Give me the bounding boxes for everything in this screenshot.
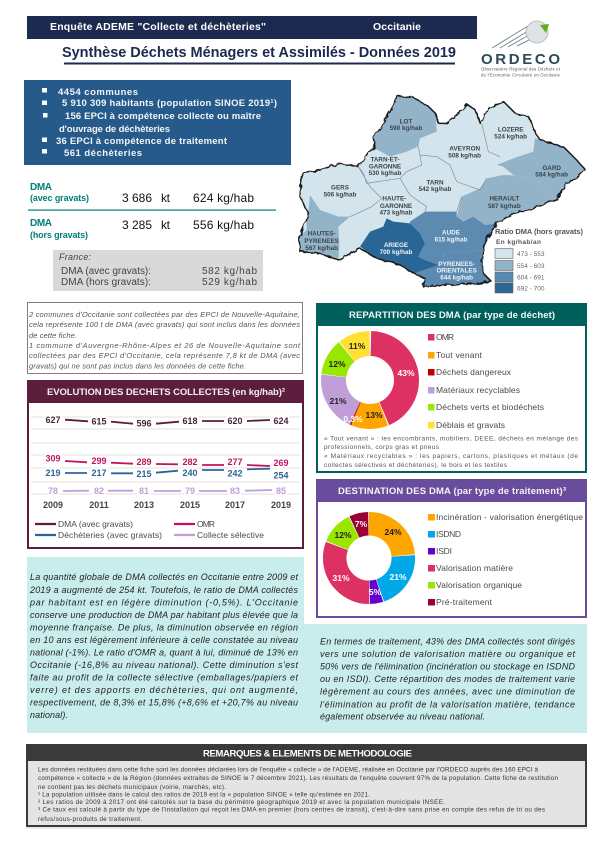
note: communes outside the perimeter: gravats) qui ne sont pas inclus dans les données de cette fiche.	[29, 362, 246, 370]
note: communes outside the perimeter	[28, 302, 302, 374]
title: Synthèse Déchets Ménagers et Assimilés - Données 2019	[62, 45, 456, 61]
map region: Lot	[373, 97, 437, 157]
line series: Collecte sélective	[63, 490, 272, 491]
labels: Collecte sélective: 78	[48, 486, 58, 496]
panel: breakdown by waste type	[316, 303, 587, 472]
panel: key figures: 561 déchèteries	[64, 148, 142, 159]
map region: Pyrenees-Orientales	[413, 250, 492, 287]
map department labels: GARD	[542, 165, 561, 172]
legend: waste types: Tout venant	[436, 350, 483, 360]
donut labels: waste types: 43%	[397, 368, 415, 378]
map legend: 692 - 700	[517, 286, 545, 292]
map outline	[299, 97, 585, 287]
donut labels: treatment types: 24%	[384, 527, 402, 537]
map department labels: 590 kg/hab	[390, 125, 422, 132]
regional DMA figures: 556 kg/hab	[193, 218, 254, 232]
definitions note: « Matériaux recyclables » : les papiers, cartons, plastiques et métaux (de	[324, 453, 578, 460]
labels: OMR: 269	[273, 458, 289, 468]
text panel: treatment commentary: 50% vers de l'élimination (incinération ou stockage en ISDND	[320, 662, 576, 672]
legend: waste types: OMR	[436, 332, 454, 342]
panel: France comparison: 582 kg/hab	[202, 266, 257, 277]
regional DMA figures: 3 285	[122, 218, 152, 232]
regional DMA figures: DMA	[30, 182, 52, 193]
panel: remarks and methodology	[26, 744, 587, 829]
text panel: collection commentary: 2019 a augmenté de 254 kt. Toutefois, le ratio de DMA collectés	[29, 585, 298, 595]
panel: France comparison: DMA (avec gravats):	[61, 266, 151, 277]
panel: key figures: 5 910 309 habitants (population SINOE 2019¹)	[62, 98, 277, 109]
panel: key figures	[24, 80, 291, 165]
map legend: 554 - 603	[517, 263, 545, 270]
legend: treatment types: Valorisation matière	[436, 563, 513, 573]
legend: treatment types: Incinération - valorisation énergétique	[436, 512, 583, 522]
x axis years: 2009	[43, 500, 63, 510]
panel heading: methodology	[26, 744, 587, 761]
legend: treatment types	[428, 512, 583, 607]
panel: evolution of collected waste	[27, 380, 304, 548]
map department labels: AVEYRON	[449, 146, 481, 153]
donut labels: treatment types: 12%	[334, 530, 352, 540]
donut labels: waste types: 13%	[365, 410, 383, 420]
donut labels: waste types	[328, 341, 415, 424]
map department labels: HERAULT	[489, 196, 519, 203]
chart grid	[31, 417, 300, 494]
map department labels: TARN	[426, 179, 444, 186]
x axis years: 2019	[271, 500, 291, 510]
map department labels: 473 kg/hab	[380, 210, 412, 217]
definitions note: professionnels, corps gras et pneus	[324, 444, 440, 451]
panel: France comparison	[53, 250, 263, 291]
line series: DMA	[65, 420, 270, 424]
panel: key figures: 36 EPCI à compétence de traitement	[56, 136, 228, 147]
labels: DMA: 618	[182, 416, 198, 426]
chart legend: Déchèteries (avec gravats)	[58, 530, 162, 540]
labels: Déchèteries: 240	[182, 468, 198, 478]
text panel: collection commentary: national).	[30, 710, 68, 720]
legend: treatment types: ISDND	[436, 529, 461, 539]
text panel: collection commentary: verre) et des apports en déchèteries, qui ont augmenté,	[30, 685, 298, 695]
text panel: collection commentary: Occitanie (-16,8% au niveau national). Cette diminution s'est	[30, 660, 298, 670]
chart legend: Collecte sélective	[197, 530, 264, 540]
donut labels: waste types: 11%	[349, 341, 366, 351]
note: communes outside the perimeter: de cette fiche.	[29, 331, 77, 340]
panel heading: destination: DESTINATION DES DMA (par type de traitement)³	[338, 486, 566, 497]
regional DMA figures	[28, 182, 276, 240]
donut labels: waste types: 12%	[328, 359, 346, 369]
note: communes outside the perimeter: cela représente 100 t de DMA (avec gravats) qui sont inclus dans les données	[29, 320, 300, 329]
definitions note	[324, 436, 579, 469]
labels: OMR: 289	[136, 457, 152, 467]
map department labels: 644 kg/hab	[440, 274, 473, 281]
map department labels: 508 kg/hab	[448, 152, 481, 159]
panel: France comparison: 529 kg/hab	[202, 277, 257, 288]
labels: Collecte sélective: 81	[139, 486, 149, 496]
logo: ORDECO: ORDECO	[481, 51, 560, 68]
text panel: collection commentary: conserve une production de DMA par habitant plus élevée que la	[30, 610, 298, 620]
text panel: collection commentary: par habitant est en légère diminution (-0,5%). L'Occitanie	[29, 597, 298, 607]
map legend: 473 - 553	[517, 251, 545, 258]
note: communes outside the perimeter: 2 communes d'Occitanie sont collectées par des EPCI de Nouvelle-Aquitaine,	[28, 310, 300, 319]
map department labels: 524 kg/hab	[494, 133, 527, 140]
panel heading: repartition	[316, 303, 587, 326]
text panel: treatment commentary: également observée au niveau national.	[320, 712, 485, 722]
panel: France comparison: France:	[59, 252, 91, 262]
labels: Collecte sélective	[48, 486, 286, 496]
x axis years: 2015	[180, 500, 200, 510]
header banner	[27, 16, 477, 39]
regional DMA figures: (avec gravats)	[30, 193, 89, 203]
map department labels: 700 kg/hab	[380, 249, 412, 256]
labels: Déchèteries: 215	[136, 469, 152, 479]
map department labels: HAUTE-	[382, 196, 406, 203]
logo: ORDECO	[481, 21, 561, 78]
x axis years: 2013	[134, 500, 154, 510]
map department labels: 567 kg/hab	[305, 245, 338, 252]
text panel: collection commentary: moyenne française. De plus, la diminution observée en région	[30, 622, 298, 632]
panel heading: destination	[316, 479, 587, 502]
definitions note: « Tout venant » : les encombrants, mobiliers, DEEE, déchets en mélange des	[324, 436, 579, 442]
regional DMA figures: kt	[161, 191, 171, 205]
labels: Collecte sélective: 85	[276, 486, 286, 496]
map department labels: GARONNE	[380, 203, 412, 210]
panel: key figures: 4454 communes	[58, 87, 138, 98]
header banner: Occitanie	[373, 21, 421, 33]
map department labels: PYRENEES	[304, 238, 339, 245]
header banner: Enquête ADEME "Collecte et déchèteries"	[50, 21, 266, 33]
logo: ORDECO: de l'Economie Circulaire en Occitanie	[481, 72, 561, 78]
methodology text: refus/sous-produits de traitement.	[38, 816, 142, 823]
methodology text	[38, 766, 558, 823]
logo: ORDECO: Observatoire Régional des Déchets et	[481, 66, 561, 72]
chart legend: OMR	[197, 519, 215, 529]
map department labels: ARIEGE	[384, 242, 408, 249]
labels: OMR: 309	[45, 453, 61, 463]
map region: Gard	[497, 138, 585, 200]
labels: OMR	[45, 453, 289, 468]
labels: DMA: 596	[136, 419, 152, 429]
methodology text: ³ Ce taux est calculé à partir du type de l'installation qui reçoit les DMA en premier (hors centres de transit), c'est-à-dire sans prise en compte des refus de tri ou des	[38, 806, 545, 814]
panel heading: evolution	[27, 380, 304, 403]
donut chart: waste types	[334, 344, 406, 416]
map: DMA ratio by department	[299, 97, 585, 287]
legend: waste types	[428, 332, 544, 430]
labels: Déchèteries	[45, 468, 289, 480]
legend: waste types: Déchets dangereux	[436, 367, 512, 377]
text panel: treatment commentary	[303, 624, 587, 733]
panel: France comparison: DMA (hors gravats):	[61, 277, 151, 288]
text panel: collection commentary: national (-1%). Le ratio d'OMR a, quant à lui, diminué de 13% en	[30, 648, 298, 658]
x axis years	[43, 500, 291, 510]
map department labels: 506 kg/hab	[324, 191, 356, 198]
labels: Déchèteries: 219	[45, 468, 61, 478]
donut labels: treatment types: 31%	[332, 573, 350, 583]
map legend: 604 - 691	[517, 274, 545, 282]
x axis years: 2017	[225, 500, 245, 510]
regional DMA figures: (hors gravats)	[30, 230, 88, 240]
map legend: Ratio DMA (hors gravats)	[495, 227, 584, 236]
labels: DMA: 620	[227, 416, 243, 426]
map department labels: 542 kg/hab	[419, 186, 451, 193]
labels: Déchèteries: 242	[227, 468, 243, 478]
donut labels: treatment types: 21%	[389, 572, 407, 582]
text panel: collection commentary: en 10 ans est légèrement inférieure à celle constatée au niveau	[30, 635, 298, 645]
methodology text: compétence « collecte » de la Région (données extraites de SINOE le 7 décembre 2021). Les résultats de l'enquête couvrent 97% de la population. Cette fiche de restitution	[38, 775, 558, 782]
chart legend	[35, 519, 264, 540]
methodology text: ne contient pas les déchets municipaux (voirie, marchés, etc).	[38, 784, 226, 791]
map region: Aude	[410, 212, 497, 265]
donut labels: treatment types	[332, 519, 407, 597]
labels: OMR: 299	[91, 456, 107, 466]
map region: Ariege	[360, 218, 438, 273]
map department labels	[304, 118, 568, 281]
labels: Collecte sélective: 79	[185, 486, 195, 496]
donut labels: treatment types: 7%	[355, 519, 368, 529]
map region: Herault	[457, 175, 557, 225]
text panel: treatment commentary: l'élimination au profit de la valorisation matière, tendance	[320, 699, 575, 709]
panel heading: repartition: REPARTITION DES DMA (par type de déchet)	[349, 310, 555, 321]
map legend	[495, 227, 584, 293]
chart legend: DMA (avec gravats)	[58, 519, 133, 529]
text panel: treatment commentary: En termes de traitement, 43% des DMA collectés sont dirigés	[320, 637, 576, 647]
regional DMA figures: DMA	[30, 218, 52, 229]
labels: Déchèteries: 254	[273, 470, 289, 480]
map department labels: 587 kg/hab	[488, 203, 521, 210]
map department labels: 615 kg/hab	[435, 236, 467, 243]
note: communes outside the perimeter: collectées par des EPCI d'Occitanie, cela représente 7,8 kt de DMA (avec	[29, 351, 300, 360]
map department labels: LOZERE	[498, 127, 524, 134]
panel: key figures: d'ouvrage de déchèteries	[59, 124, 170, 135]
text panel: treatment commentary: vers une solution de valorisation matière ou organique et	[320, 649, 575, 659]
legend: waste types: Déblais et gravats	[436, 420, 505, 430]
donut labels: waste types: 0,3%	[343, 414, 363, 424]
labels: DMA: 624	[273, 416, 289, 426]
legend: treatment types: Pré-traitement	[436, 597, 493, 607]
labels: Déchèteries: 217	[91, 468, 107, 478]
map legend: En kg/hab/an	[496, 239, 541, 246]
map department labels: AUDE	[442, 230, 460, 237]
text panel: collection commentary: La quantité globale de DMA collectés en Occitanie entre 2009 et	[30, 572, 298, 582]
text panel: collection commentary: respectivement, de 8,3% et 15,8% (+8,6% et +20,7% au niveau	[30, 698, 298, 708]
line series: Déchèteries	[65, 469, 270, 473]
map department labels: 584 kg/hab	[535, 172, 568, 179]
labels: Collecte sélective: 82	[94, 486, 104, 496]
donut labels: waste types: 21%	[329, 396, 347, 406]
panel heading: methodology: REMARQUES & ELEMENTS DE METHODOLOGIE	[203, 748, 412, 760]
methodology text: Les données restituées dans cette fiche sont les données déclarées lors de l'enquête « collecte » de l'ADEME, réalisée en Occitanie par l'ORDECO auprès des 160 EPCI à	[38, 766, 538, 774]
map department labels: PYRENEES-	[438, 261, 475, 268]
methodology text: ¹ La population utilisée dans le calcul des ratios de 2019 est la « population SINOE » telle qu'estimée en 2021.	[38, 792, 370, 798]
legend: treatment types: ISDI	[436, 546, 452, 556]
labels: OMR: 277	[227, 457, 243, 467]
donut labels: treatment types: 5%	[369, 587, 382, 597]
definitions note: collectes sélectives et déchèteries), le bois et les textiles	[324, 462, 508, 469]
map region: Hautes-Pyrenees	[299, 195, 350, 260]
map internal borders	[350, 123, 500, 217]
x axis years: 2011	[89, 500, 109, 510]
text panel: collection commentary: faite au profit de la collecte sélective (emballages/papiers et	[30, 673, 298, 683]
labels: DMA: 615	[91, 417, 107, 427]
map department labels: 530 kg/hab	[369, 170, 401, 177]
text panel: collection commentary	[27, 557, 304, 733]
panel: destination by treatment type	[316, 479, 587, 617]
legend: treatment types: Valorisation organique	[436, 580, 522, 590]
map department labels: TARN-ET-	[370, 156, 400, 163]
line series: OMR	[65, 461, 270, 466]
note: communes outside the perimeter: 1 commune d'Auvergne-Rhône-Alpes et 26 de Nouvelle-Aquitaine sont	[29, 341, 301, 350]
labels: OMR: 282	[182, 457, 198, 467]
panel heading: evolution: EVOLUTION DES DECHETS COLLECTES (en kg/hab)²	[47, 387, 285, 398]
map department labels: ORIENTALES	[437, 268, 477, 275]
map department labels: HAUTES-	[308, 231, 336, 238]
methodology text: ² Les ratios de 2009 à 2017 ont été calculés sur la base du périmètre géographique 2019 et avec la population municipale INSEE.	[38, 799, 445, 806]
labels: DMA	[45, 415, 289, 429]
map department labels: LOT	[400, 118, 412, 125]
regional DMA figures: 3 686	[122, 191, 152, 205]
map department labels: GERS	[331, 185, 349, 192]
regional DMA figures: kt	[161, 218, 171, 232]
map department labels: GARONNE	[369, 163, 401, 170]
donut chart: treatment types	[335, 524, 403, 592]
legend: waste types: Déchets verts et biodéchets	[436, 402, 544, 412]
panel: key figures: 156 EPCI à compétence collecte ou maître	[65, 111, 261, 122]
regional DMA figures: 624 kg/hab	[193, 191, 254, 205]
text panel: treatment commentary: ou en ISDI). Cette répartition des modes de traitement varie	[320, 674, 575, 684]
text panel: treatment commentary: légèrement au cours des années, avec une diminution de	[320, 687, 575, 697]
labels: Collecte sélective: 83	[230, 486, 240, 496]
legend: waste types: Matériaux recyclables	[436, 385, 520, 395]
labels: DMA: 627	[45, 415, 61, 425]
